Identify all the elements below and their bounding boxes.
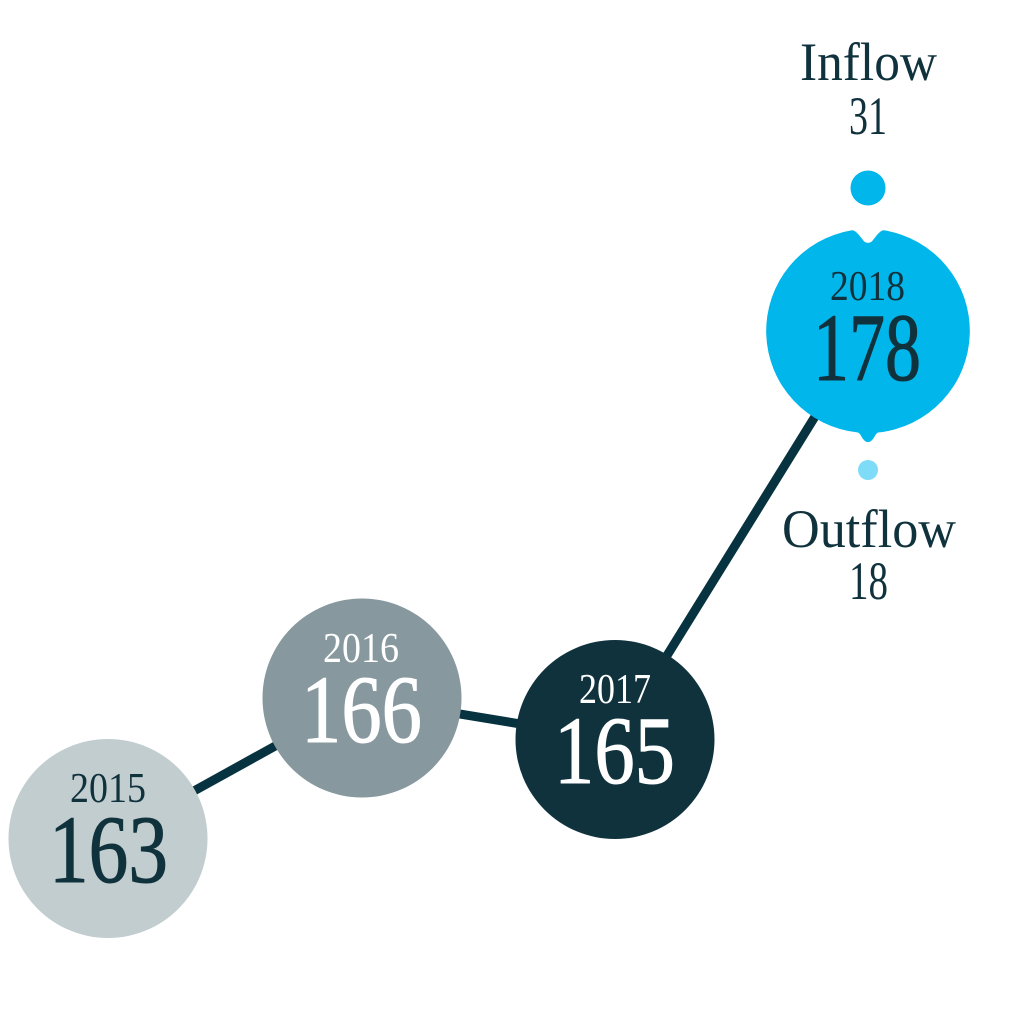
node: 2017: 2017: [579, 667, 651, 713]
node: 2018: [766, 230, 970, 442]
inflow dot: [850, 170, 886, 206]
node: 2018: 2018: [830, 264, 905, 310]
inflow label: [800, 32, 937, 146]
outflow dot: [858, 460, 878, 480]
inflow label: 31: [849, 86, 887, 146]
node: 2016: 2016: [323, 626, 399, 672]
outflow label: Outflow: [782, 499, 956, 559]
node: 2015: 2015: [70, 766, 146, 812]
node: 2017: [516, 640, 714, 839]
node: 2017: 165: [554, 697, 675, 804]
node: 2016: 166: [301, 656, 422, 763]
node: 2015: [8, 739, 208, 938]
node: 2015: 163: [49, 796, 168, 903]
outflow label: 18: [849, 551, 888, 611]
node: 2018: 178: [813, 294, 921, 401]
connecting line between years: [108, 331, 868, 838]
node: 2016: [262, 598, 462, 798]
inflow label: Inflow: [800, 32, 937, 92]
outflow label: [782, 499, 956, 611]
